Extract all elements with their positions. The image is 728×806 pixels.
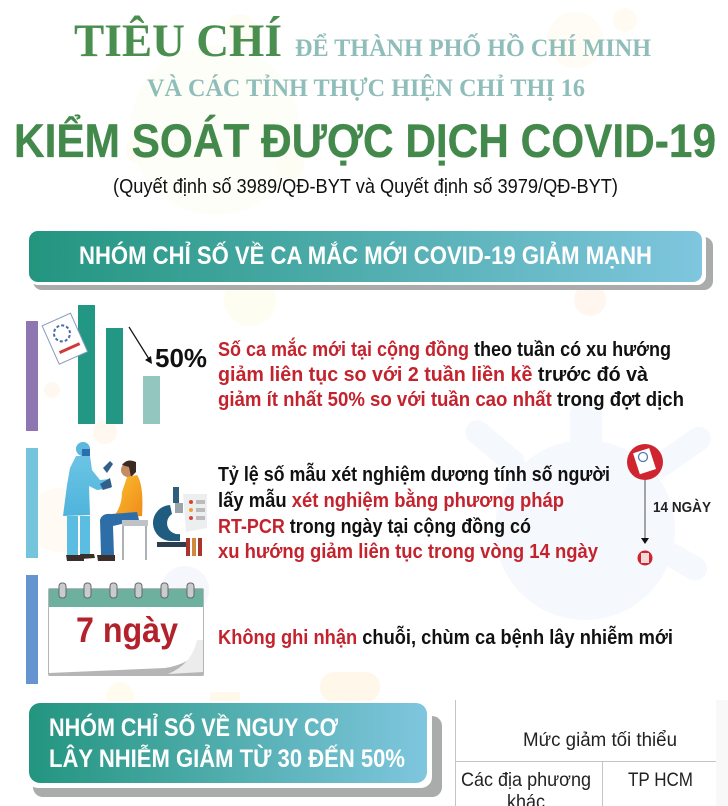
text: new community cases: giảm liên tục so với 2 tuần liền kề trước đó và: [218, 363, 649, 386]
icon: calendar 7 ngày: 7 ngày: [76, 611, 178, 650]
table: minimum reduction: [455, 700, 728, 806]
text: no new clusters: Không ghi nhận chuỗi, chùm ca bệnh lây nhiễm mới: [218, 625, 673, 649]
illustration: medical worker swabbing patient: [63, 442, 148, 561]
banner: nhóm chỉ số ca mắc mới: NHÓM CHỈ SỐ VỀ CA MẮC MỚI COVID-19 GIẢM MẠNH: [79, 240, 652, 270]
table: minimum reduction: Mức giảm tối thiểu: [523, 729, 677, 751]
icon: document: [42, 313, 88, 364]
banner: nhóm chỉ số nguy cơ: LÂY NHIỄM GIẢM TỪ 30 ĐẾN 50%: [49, 743, 405, 773]
icon: calendar 7 ngày: [48, 583, 204, 676]
text: positive test rate: [218, 462, 610, 563]
row 1: side bar: [26, 321, 38, 431]
arrow: down to 50%: [129, 327, 152, 364]
timeline: 14 days: [627, 444, 711, 566]
banner: nhóm chỉ số nguy cơ: NHÓM CHỈ SỐ VỀ NGUY CƠ: [49, 712, 339, 742]
label: 50%: 50%: [155, 343, 207, 373]
row 3: side bar: [26, 575, 38, 684]
text: new community cases: giảm ít nhất 50% so với tuần cao nhất trong đợt dịch: [218, 388, 684, 411]
title: tiêu chí: TIÊU CHÍ: [74, 15, 282, 67]
table: minimum reduction: Các địa phương: [461, 769, 591, 791]
row 2: side bar: [26, 448, 38, 558]
text: positive test rate: Tỷ lệ số mẫu xét nghiệm dương tính số người: [218, 462, 610, 486]
text: positive test rate: RT-PCR trong ngày tại cộng đồng có: [218, 515, 531, 538]
timeline: 14 days: 14 NGÀY: [653, 499, 711, 516]
table: minimum reduction: TP HCM: [628, 769, 693, 791]
text: positive test rate: lấy mẫu xét nghiệm bằng phương pháp: [218, 488, 564, 512]
text: new community cases: Số ca mắc mới tại cộng đồng theo tuần có xu hướng: [218, 337, 671, 361]
bar chart: cases decreasing: [78, 305, 160, 424]
subtitle: decisions: (Quyết định số 3989/QĐ-BYT và Quyết định số 3979/QĐ-BYT): [113, 176, 618, 198]
title: tiêu chí: VÀ CÁC TỈNH THỰC HIỆN CHỈ THỊ 16: [147, 74, 585, 102]
title: tiêu chí: [74, 15, 652, 102]
illustration: microscope and test tubes: [153, 487, 207, 556]
banner: nhóm chỉ số ca mắc mới: [29, 231, 713, 290]
text: new community cases: [218, 337, 684, 411]
title: tiêu chí: ĐỂ THÀNH PHỐ HỒ CHÍ MINH: [295, 33, 652, 62]
banner: nhóm chỉ số nguy cơ: [27, 701, 442, 797]
text: positive test rate: xu hướng giảm liên tục trong vòng 14 ngày: [218, 540, 599, 563]
